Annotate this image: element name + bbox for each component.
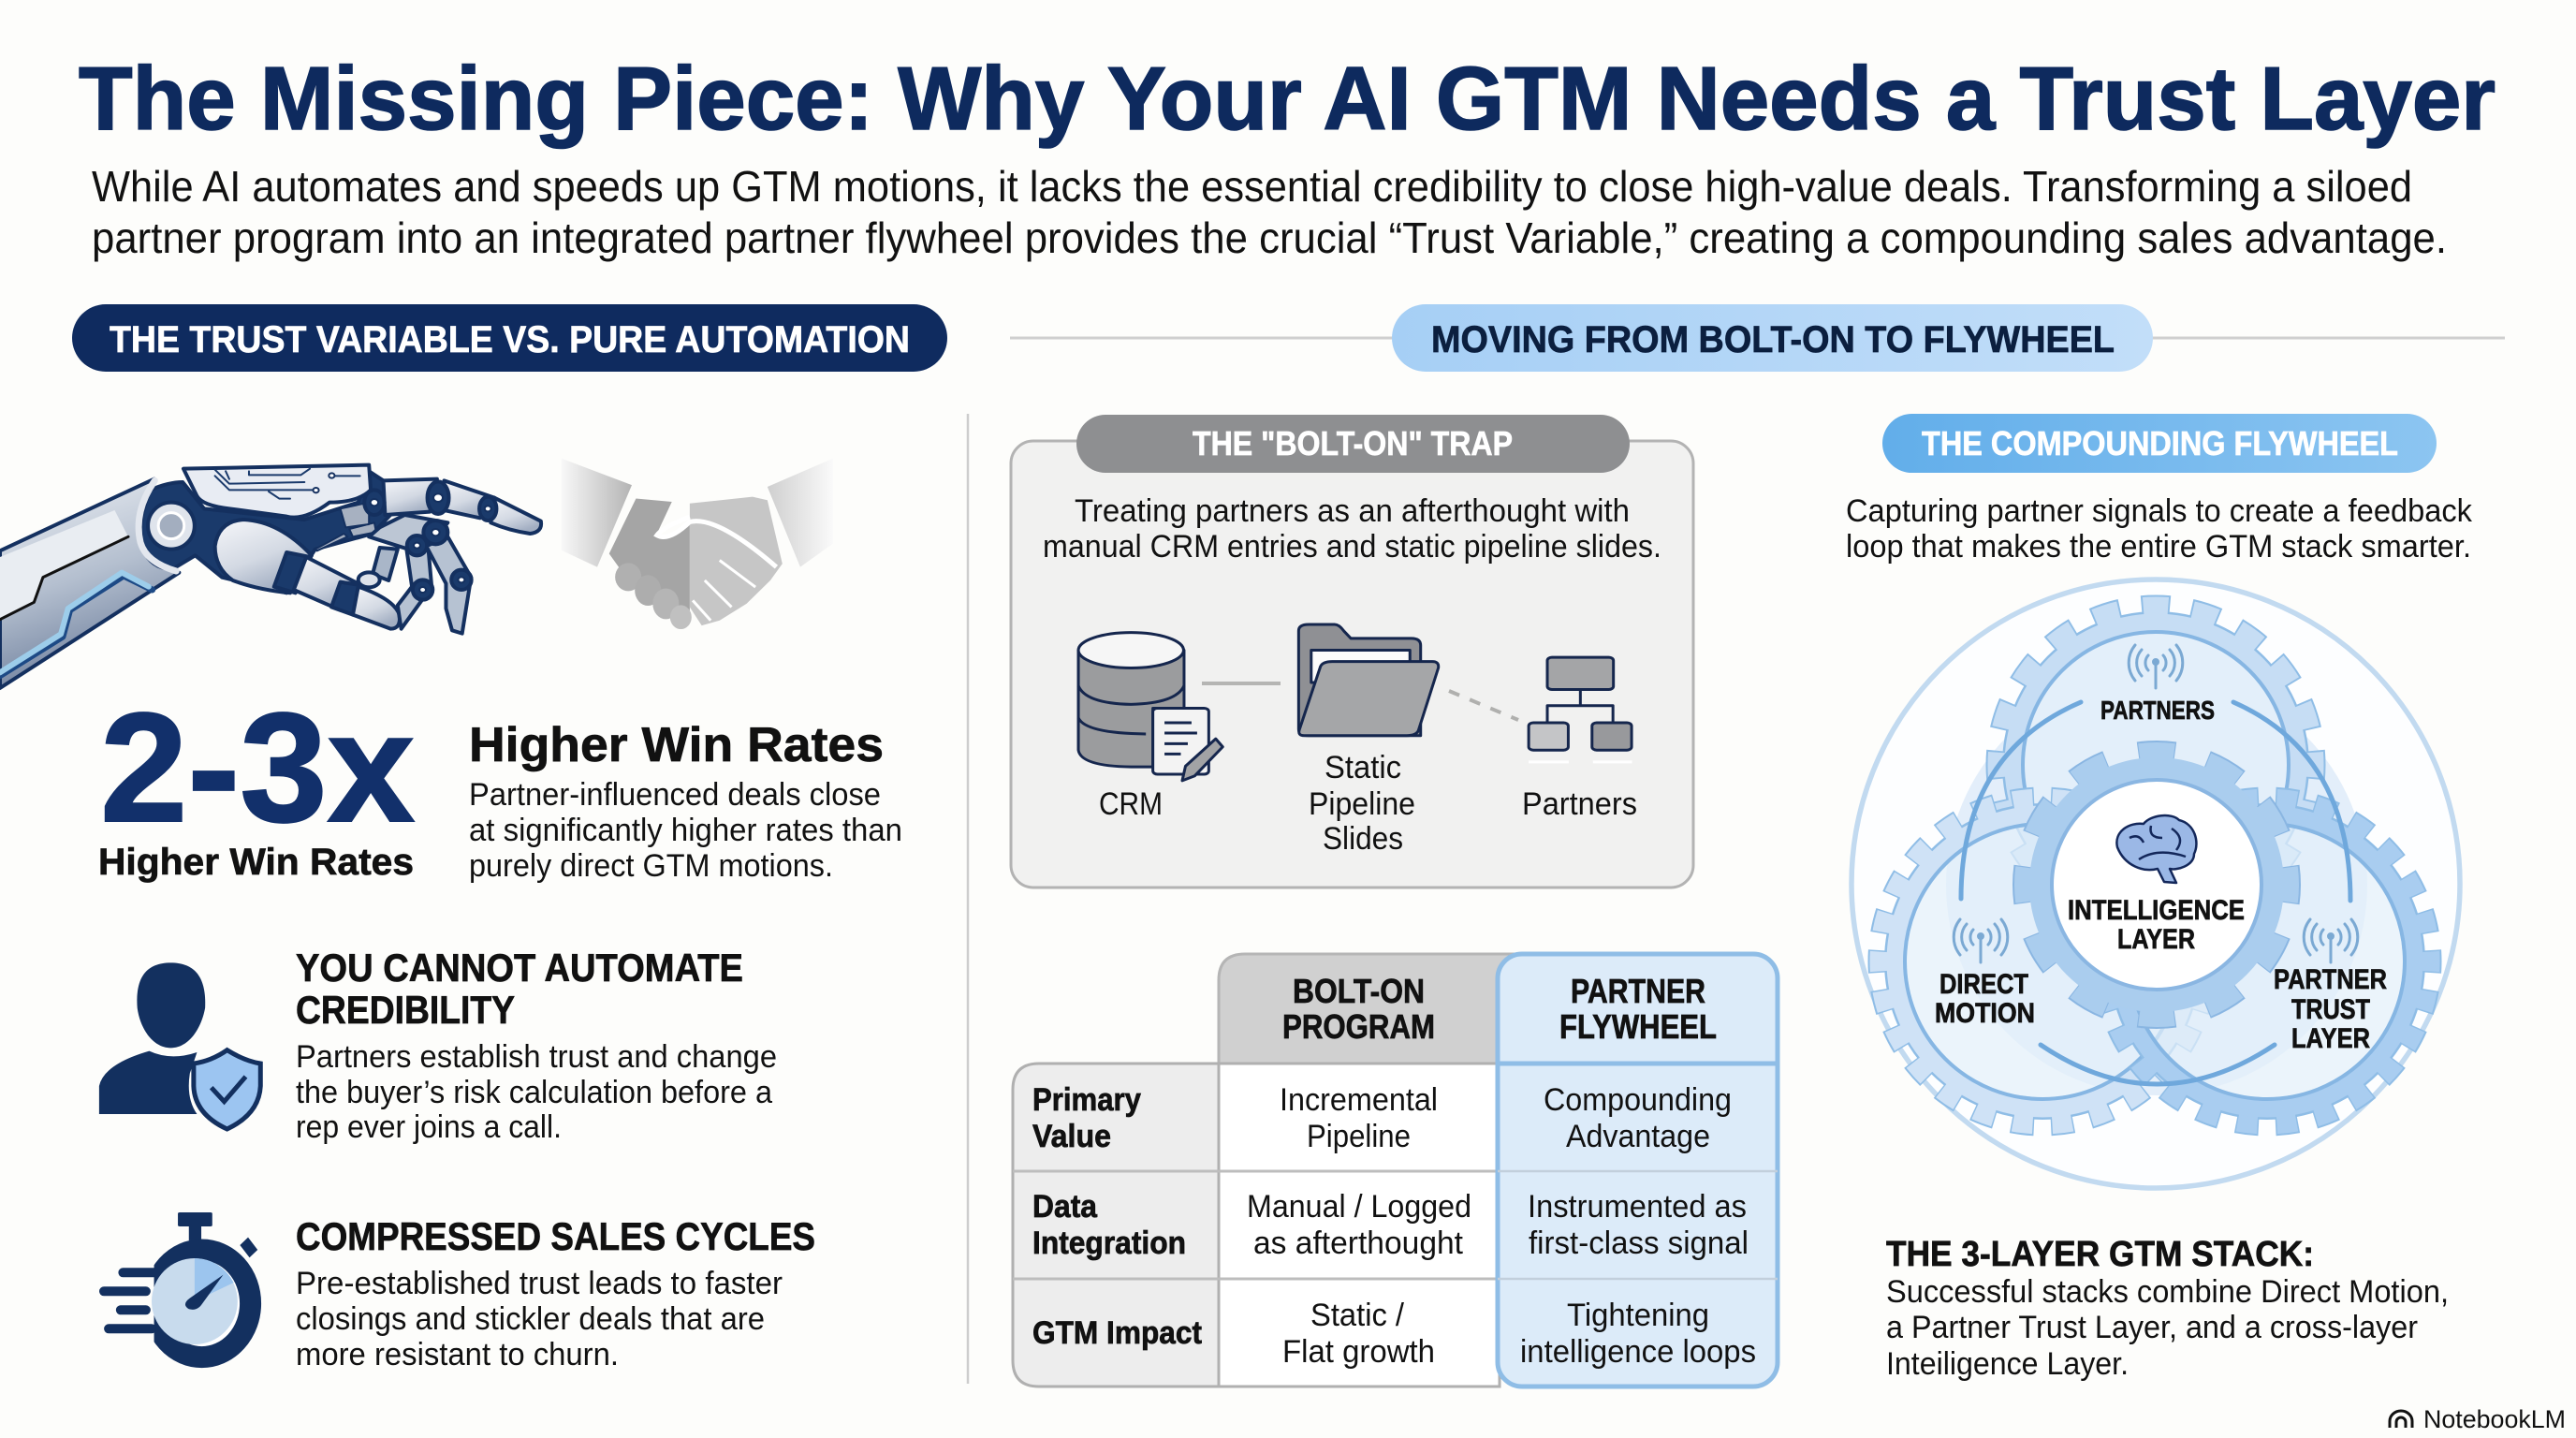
icon: partner org chart bbox=[1529, 657, 1632, 762]
section header: trust variable bbox=[72, 304, 947, 372]
icon: folder bbox=[1298, 624, 1439, 736]
title: The Missing Piece: Why Your AI GTM Needs a Trust Layer bbox=[79, 49, 2496, 149]
text block: 3-layer GTM stack: THE 3-LAYER GTM STACK: bbox=[1886, 1235, 2314, 1274]
panel heading: bolt-on trap bbox=[1076, 415, 1630, 473]
text block: 3-layer GTM stack: Successful stacks combine Direct Motion, bbox=[1886, 1274, 2449, 1310]
column headers: PROGRAM bbox=[1282, 1007, 1435, 1046]
gear: partner trust layer bbox=[2103, 798, 2431, 1125]
bolt-on column values: Static / bbox=[1310, 1298, 1405, 1333]
row labels: Data bbox=[1032, 1189, 1098, 1225]
flywheel description: Capturing partner signals to create a feedback bbox=[1846, 493, 2473, 529]
flywheel column values bbox=[1520, 1082, 1756, 1370]
gear labels: LAYER bbox=[2291, 1023, 2370, 1054]
illustration: robot hand bbox=[0, 465, 541, 688]
gear labels bbox=[1935, 696, 2387, 1054]
comparison table bbox=[1013, 954, 1778, 1387]
icon: signal partners bbox=[2129, 645, 2183, 688]
icon: CRM database bbox=[1078, 633, 1222, 781]
subtitle text block: While AI automates and speeds up GTM motions, it lacks the essential credibility to close high-value deals. Transforming a siloed bbox=[92, 162, 2412, 211]
row labels: Value bbox=[1032, 1119, 1111, 1154]
flywheel column values: intelligence loops bbox=[1520, 1334, 1756, 1370]
panel: bolt-on trap bbox=[1011, 415, 1693, 888]
subtitle text block bbox=[92, 162, 2447, 262]
flywheel heading: THE COMPOUNDING FLYWHEEL bbox=[1922, 424, 2398, 462]
row labels: Primary bbox=[1032, 1082, 1141, 1118]
row labels: GTM Impact bbox=[1032, 1315, 1202, 1351]
bolt-on column values: Incremental bbox=[1280, 1082, 1438, 1118]
gear labels: INTELLIGENCE bbox=[2068, 895, 2245, 926]
icon: signal direct motion bbox=[1954, 919, 2008, 962]
illustration: handshake bbox=[562, 459, 833, 629]
icon labels bbox=[1099, 750, 1637, 857]
text block: cannot automate credibility: the buyer’s risk calculation before a bbox=[296, 1075, 772, 1110]
column headers: BOLT-ON bbox=[1293, 972, 1425, 1010]
flywheel description bbox=[1846, 493, 2473, 565]
section header: bolt-on to flywheel: MOVING FROM BOLT-ON TO FLYWHEEL bbox=[1431, 319, 2115, 360]
flywheel heading bbox=[1882, 414, 2437, 473]
gear labels: MOTION bbox=[1935, 998, 2035, 1029]
icon labels: CRM bbox=[1099, 786, 1163, 822]
flywheel column values: Advantage bbox=[1566, 1119, 1710, 1154]
icon: stopwatch bbox=[104, 1212, 257, 1357]
text block: cannot automate credibility: Partners establish trust and change bbox=[296, 1039, 777, 1075]
text block: cannot automate credibility: YOU CANNOT AUTOMATE bbox=[296, 946, 743, 990]
section header: bolt-on to flywheel bbox=[1392, 304, 2153, 372]
bolt-on column values: Pipeline bbox=[1307, 1119, 1411, 1154]
flywheel column values: first-class signal bbox=[1529, 1225, 1749, 1261]
bolt-on column values bbox=[1247, 1082, 1471, 1370]
flywheel column values: Instrumented as bbox=[1528, 1189, 1747, 1225]
row labels: Integration bbox=[1032, 1225, 1186, 1261]
bolt-on column values: as afterthought bbox=[1253, 1225, 1464, 1261]
text block: compressed sales cycles: more resistant to churn. bbox=[296, 1337, 619, 1372]
text block: higher win rates: Partner-influenced deals close bbox=[469, 777, 881, 813]
bolt-on column values: Flat growth bbox=[1282, 1334, 1435, 1370]
text block: cannot automate credibility: rep ever joins a call. bbox=[296, 1109, 562, 1145]
text block: cannot automate credibility: CREDIBILITY bbox=[296, 988, 515, 1032]
text block: compressed sales cycles: closings and stickler deals that are bbox=[296, 1301, 765, 1337]
gear labels: LAYER bbox=[2117, 924, 2195, 955]
icon labels: Static bbox=[1325, 750, 1401, 785]
icon: signal partner trust bbox=[2304, 919, 2358, 962]
text block: higher win rates bbox=[469, 718, 902, 884]
text block: cannot automate credibility bbox=[296, 946, 777, 1145]
panel description bbox=[1043, 493, 1661, 565]
gear labels: PARTNERS bbox=[2100, 696, 2215, 725]
text block: higher win rates: at significantly higher rates than bbox=[469, 813, 902, 848]
icon labels: Slides bbox=[1323, 821, 1403, 857]
gear labels: PARTNER bbox=[2274, 964, 2387, 995]
NotebookLM logo: NotebookLM bbox=[2423, 1405, 2566, 1433]
text block: higher win rates: purely direct GTM motions. bbox=[469, 848, 833, 884]
diagram: three-gear flywheel bbox=[1852, 580, 2460, 1188]
text block: 3-layer GTM stack: a Partner Trust Layer, and a cross-layer bbox=[1886, 1310, 2418, 1345]
text block: 3-layer GTM stack bbox=[1886, 1235, 2449, 1382]
column headers: PARTNER bbox=[1571, 972, 1705, 1010]
icon labels: Pipeline bbox=[1309, 786, 1415, 822]
icon: person with shield bbox=[99, 962, 260, 1129]
stat: 2-3x: 2-3x bbox=[100, 682, 415, 855]
text block: compressed sales cycles bbox=[296, 1214, 815, 1372]
gear: intelligence layer bbox=[2025, 753, 2289, 1017]
row labels bbox=[1032, 1082, 1202, 1351]
flywheel column values: Compounding bbox=[1544, 1082, 1732, 1118]
section header: trust variable: THE TRUST VARIABLE VS. PURE AUTOMATION bbox=[110, 319, 910, 360]
panel heading: bolt-on trap: THE "BOLT-ON" TRAP bbox=[1193, 424, 1513, 462]
panel description: manual CRM entries and static pipeline slides. bbox=[1043, 529, 1661, 565]
text block: compressed sales cycles: Pre-established trust leads to faster bbox=[296, 1266, 783, 1301]
feedback loop arcs bbox=[1961, 702, 2350, 1084]
gear labels: DIRECT bbox=[1939, 969, 2028, 1000]
gear: direct motion bbox=[1879, 798, 2206, 1125]
panel description: Treating partners as an afterthought with bbox=[1075, 493, 1630, 529]
flywheel description: loop that makes the entire GTM stack smarter. bbox=[1846, 529, 2471, 565]
column headers bbox=[1282, 972, 1717, 1046]
text block: 3-layer GTM stack: Inteiligence Layer. bbox=[1886, 1346, 2129, 1382]
icon: brain bbox=[2116, 815, 2196, 883]
icon labels: Partners bbox=[1522, 786, 1637, 822]
column headers: FLYWHEEL bbox=[1559, 1007, 1717, 1046]
subtitle text block: partner program into an integrated partner flywheel provides the crucial “Trust Variable,” creating a compounding sales advantage. bbox=[92, 213, 2447, 262]
flywheel column values: Tightening bbox=[1567, 1298, 1709, 1333]
text block: compressed sales cycles: COMPRESSED SALES CYCLES bbox=[296, 1214, 815, 1258]
gear labels: TRUST bbox=[2291, 994, 2370, 1025]
stat: 2-3x: Higher Win Rates bbox=[98, 842, 414, 883]
text block: higher win rates: Higher Win Rates bbox=[469, 718, 884, 772]
bolt-on column values: Manual / Logged bbox=[1247, 1189, 1471, 1225]
gear: partners bbox=[1997, 606, 2315, 924]
